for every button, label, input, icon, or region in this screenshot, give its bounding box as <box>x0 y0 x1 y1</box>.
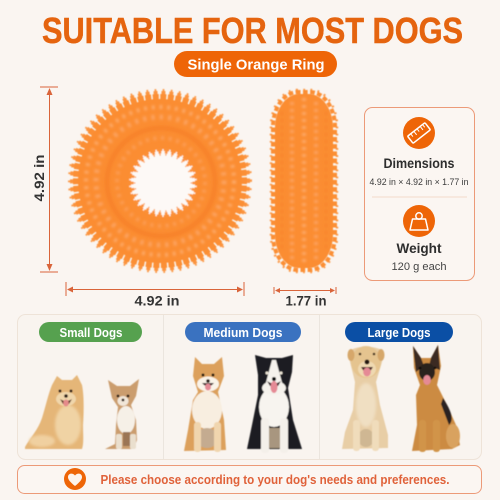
notice text: Please choose according to your dog's needs and preferences. <box>100 473 450 487</box>
weight value: 120 g each <box>392 261 446 273</box>
weight heading: Weight <box>396 240 442 256</box>
icon: weight <box>403 205 435 237</box>
icon: ruler <box>403 117 435 149</box>
panel: specifications <box>364 108 474 280</box>
footer notice <box>18 466 482 494</box>
medium dogs label <box>185 322 301 342</box>
panel: dog size groups <box>18 314 482 460</box>
small dogs label: Small Dogs <box>60 326 123 340</box>
thickness dimension label: 1.77 in <box>286 294 326 308</box>
icon: heart <box>64 468 86 490</box>
subtitle pill: Single Orange Ring <box>188 56 324 74</box>
small dogs label <box>39 322 142 342</box>
dog: german shepherd <box>412 345 460 452</box>
vertical dimension label: 4.92 in <box>31 154 47 202</box>
large dogs label <box>345 322 453 342</box>
dimensions values: 4.92 in × 4.92 in × 1.77 in <box>370 177 468 187</box>
ring toy side view <box>271 90 337 272</box>
dog: shiba <box>184 357 226 452</box>
width dimension label: 4.92 in <box>134 292 180 308</box>
dog: pomeranian <box>25 375 84 449</box>
width dimension arrow <box>66 282 244 296</box>
dimensions heading: Dimensions <box>384 156 454 171</box>
large dogs label: Large Dogs <box>368 326 431 340</box>
subtitle pill <box>174 51 337 77</box>
dog: border collie <box>247 355 302 453</box>
vertical dimension arrow <box>40 87 58 272</box>
dog: chihuahua <box>105 379 139 449</box>
ring toy front view <box>70 90 250 272</box>
dog: labrador <box>342 346 388 451</box>
medium dogs label: Medium Dogs <box>204 326 283 340</box>
thickness dimension arrow <box>274 287 336 294</box>
